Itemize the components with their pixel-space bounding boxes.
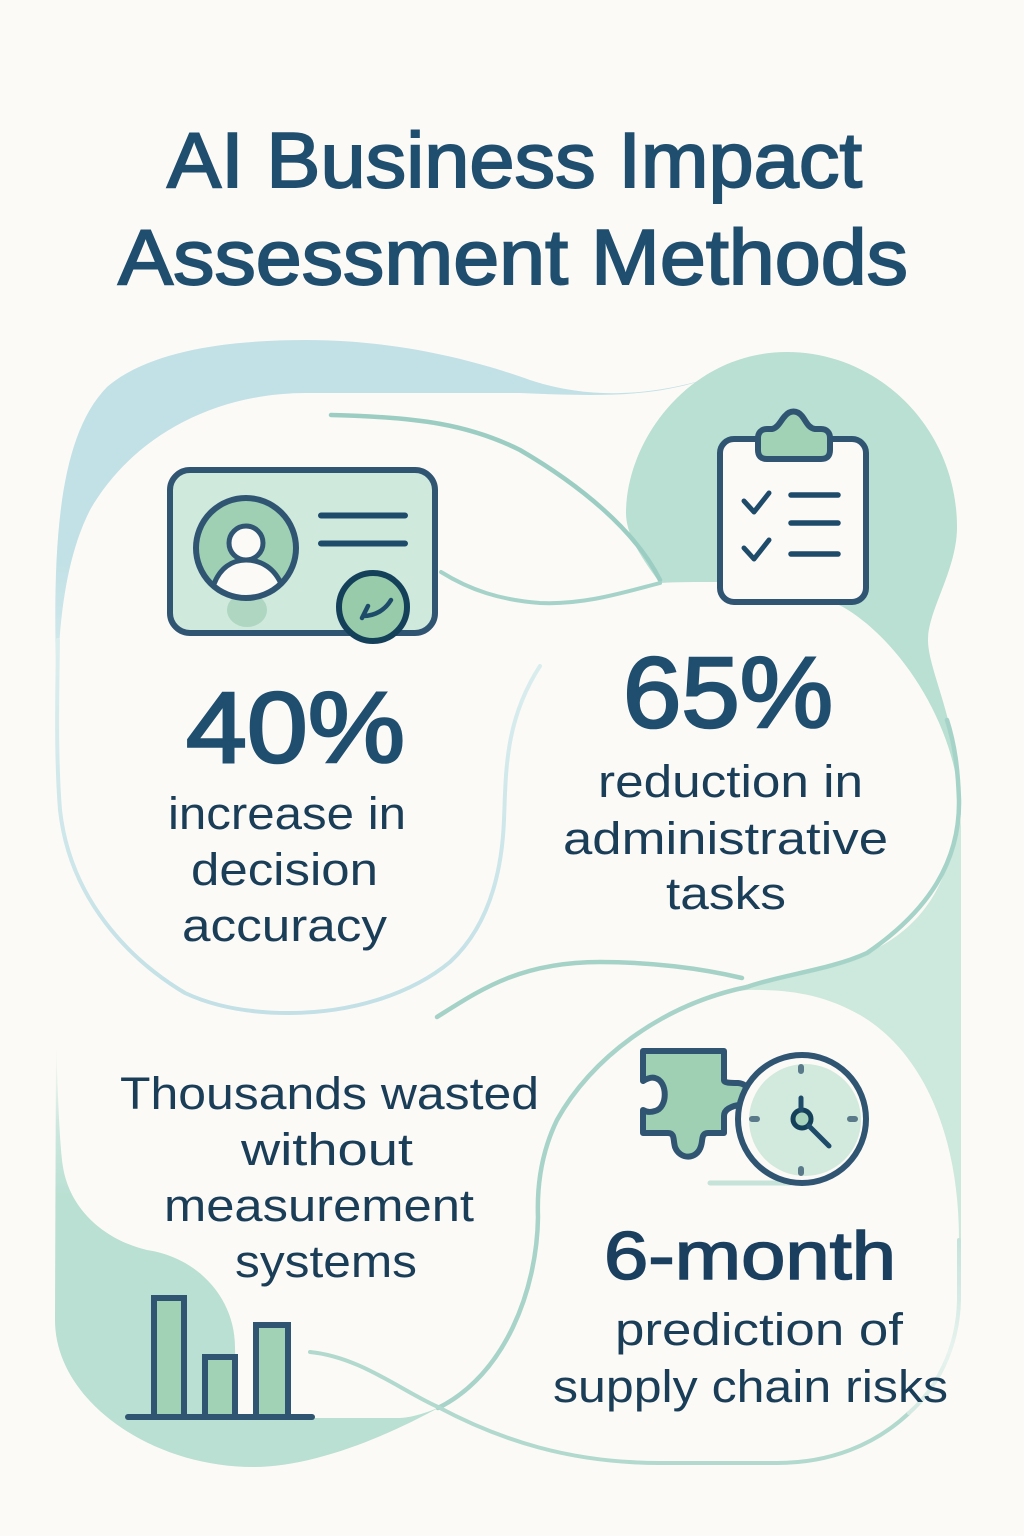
stat: 6-month xyxy=(553,1218,948,1412)
line: middle connector xyxy=(437,962,742,1017)
stat: 6-month: 6-month xyxy=(604,1218,896,1294)
shape: green blob top right xyxy=(626,352,958,790)
line: ring around 65 percent xyxy=(747,720,959,987)
line: ring around 6-month xyxy=(438,987,747,1408)
stat: 65 percent: 65% xyxy=(623,637,833,749)
text lines xyxy=(321,516,405,544)
checks xyxy=(744,493,769,559)
card body xyxy=(170,470,435,633)
stat: 40 percent: accuracy xyxy=(182,900,388,951)
text: thousands wasted: measurement xyxy=(164,1180,475,1231)
check badge xyxy=(339,573,407,641)
line: top connector xyxy=(331,415,660,580)
stat: 65 percent: administrative xyxy=(563,813,888,864)
icon: puzzle piece and clock xyxy=(643,1051,866,1183)
stat: 40 percent: 40% xyxy=(186,672,405,784)
stat: 65 percent xyxy=(563,637,888,919)
icon: ID card xyxy=(170,470,435,641)
shape: pale green wedge right xyxy=(680,790,961,1240)
line: bottom right sweep xyxy=(310,1352,909,1463)
avatar xyxy=(196,498,296,600)
title: Assessment Methods xyxy=(118,213,908,301)
shadow stroke xyxy=(710,1180,790,1186)
stat: 65 percent: tasks xyxy=(666,868,786,919)
icon: clipboard checklist xyxy=(720,412,866,602)
clip xyxy=(758,412,830,459)
stat: 40 percent: decision xyxy=(191,844,378,895)
line: connector from card xyxy=(441,572,660,603)
smudge xyxy=(227,593,267,627)
clock xyxy=(738,1055,866,1183)
text: thousands wasted: Thousands wasted xyxy=(120,1068,539,1119)
line: ring around 40 percent xyxy=(57,640,540,1013)
text: thousands wasted xyxy=(120,1068,539,1287)
line: lower right fade xyxy=(909,1240,959,1413)
shape: green blob bottom left xyxy=(55,1040,440,1467)
puzzle piece xyxy=(643,1051,753,1157)
stat: 6-month: supply chain risks xyxy=(553,1361,948,1412)
stat: 40 percent: increase in xyxy=(168,788,406,839)
shape: blue swoosh top left xyxy=(55,340,703,700)
stat: 40 percent xyxy=(168,672,406,951)
title: AI Business Impact xyxy=(167,116,862,204)
list lines xyxy=(791,495,838,554)
stat: 6-month: prediction of xyxy=(615,1304,904,1355)
stat: 65 percent: reduction in xyxy=(598,756,863,807)
text: thousands wasted: systems xyxy=(235,1236,417,1287)
title xyxy=(118,116,908,301)
text: thousands wasted: without xyxy=(240,1124,414,1175)
icon: bar chart xyxy=(128,1298,312,1417)
